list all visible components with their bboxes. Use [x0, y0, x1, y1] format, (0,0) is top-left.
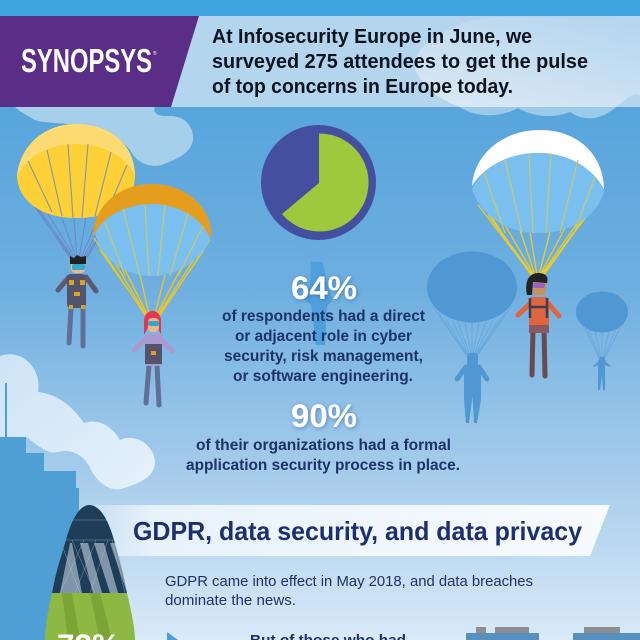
section heading: GDPR, data security, and data privacy	[133, 516, 583, 546]
logo: Synopsys: SYNOPSYS	[21, 42, 152, 79]
stat: 90%: of their organizations had a formal	[196, 437, 451, 454]
header text	[212, 26, 588, 98]
stat: 90%	[186, 398, 460, 474]
silhouette parachutist: small	[576, 292, 628, 390]
parachutist: orange canopy	[93, 184, 212, 405]
stat: 90%: 90%	[291, 398, 357, 434]
stat: 90%: application security process in place.	[186, 457, 460, 474]
stat: 64%: or adjacent role in cyber	[235, 328, 412, 345]
stat: 64%: security, risk management,	[224, 348, 423, 365]
stat: 64%	[222, 270, 425, 385]
header band	[0, 16, 640, 107]
parachutist: yellow canopy	[17, 124, 135, 346]
section band	[90, 505, 610, 556]
arrow marker	[167, 632, 178, 640]
cloud: lower left	[0, 354, 155, 489]
buildings: lower right	[466, 627, 640, 640]
pie chart: 64%	[261, 125, 376, 240]
intro text	[165, 574, 533, 609]
stat: 64%: 64%	[291, 270, 357, 306]
header top strip	[0, 0, 640, 16]
stat: 64%: or software engineering.	[233, 368, 413, 385]
intro text: dominate the news.	[165, 593, 296, 609]
cloud: upper left	[15, 107, 193, 166]
silhouette parachutist: large	[427, 252, 517, 423]
header text: of top concerns in Europe today.	[212, 76, 513, 98]
skyline building	[0, 437, 79, 640]
header text: At Infosecurity Europe in June, we	[212, 26, 532, 48]
logo panel	[0, 16, 199, 107]
cloud: header right	[415, 16, 640, 118]
pie chart parachute silhouette	[290, 235, 345, 345]
header text: surveyed 275 attendees to get the pulse	[212, 51, 588, 73]
intro text: GDPR came into effect in May 2018, and data breaches	[165, 574, 533, 590]
parachutist: white canopy	[472, 130, 604, 376]
stat: 64%: of respondents had a direct	[222, 308, 425, 325]
gherkin tower	[45, 505, 135, 640]
antenna	[5, 383, 7, 437]
logo: Synopsys: ®	[153, 50, 157, 57]
